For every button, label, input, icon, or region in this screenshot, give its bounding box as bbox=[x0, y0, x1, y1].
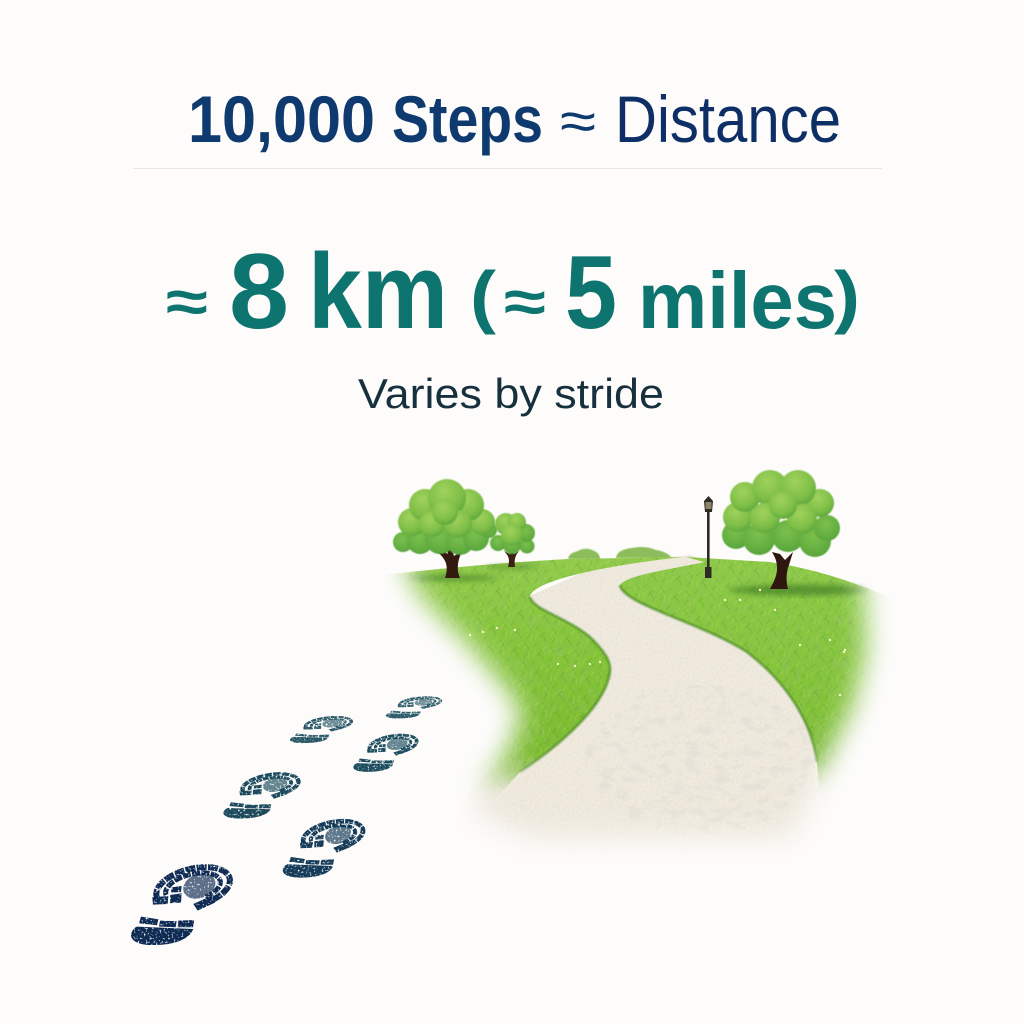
infographic canvas bbox=[131, 94, 886, 945]
footprint 4 bbox=[353, 732, 419, 772]
footprint 5 bbox=[290, 715, 354, 743]
main distance figure: ≈ bbox=[504, 268, 546, 335]
title: Steps bbox=[392, 82, 543, 156]
main distance figure: 8 bbox=[229, 231, 289, 351]
tree: left bbox=[393, 479, 497, 578]
footprint 3 bbox=[223, 770, 301, 819]
distant bushes bbox=[568, 547, 672, 559]
main distance figure bbox=[166, 231, 860, 351]
lamp post bbox=[704, 496, 713, 578]
main distance figure: miles bbox=[638, 256, 837, 345]
park scene bbox=[390, 469, 886, 849]
main distance figure: km bbox=[308, 231, 448, 351]
main distance figure: ) bbox=[834, 257, 860, 335]
tree: small bbox=[490, 513, 535, 567]
title: 10,000 bbox=[188, 82, 375, 156]
title: Distance bbox=[615, 82, 841, 156]
main distance figure: 5 bbox=[565, 235, 617, 351]
footprints trail bbox=[131, 695, 443, 945]
footprint 6 bbox=[386, 695, 443, 718]
main distance figure: ( bbox=[470, 257, 497, 335]
right grass blade texture bbox=[624, 558, 869, 772]
grass fields bbox=[390, 557, 886, 796]
tree shadows bbox=[402, 565, 870, 596]
meadow and path bbox=[390, 555, 886, 849]
title: ≈ bbox=[560, 89, 596, 152]
meadow flowers bbox=[469, 589, 846, 696]
path wear patch bbox=[585, 685, 815, 835]
grass edge shading bbox=[520, 585, 817, 772]
right grass bbox=[620, 557, 886, 789]
main distance figure: ≈ bbox=[166, 268, 208, 335]
left grass bbox=[390, 557, 682, 796]
title bbox=[188, 82, 841, 156]
footprint 2 bbox=[283, 816, 366, 878]
tree: right bbox=[722, 470, 840, 589]
left grass blade texture bbox=[409, 558, 658, 778]
subtitle: Varies by stride bbox=[358, 370, 664, 417]
footprint 1 bbox=[131, 860, 234, 945]
gravel path bbox=[470, 555, 824, 849]
